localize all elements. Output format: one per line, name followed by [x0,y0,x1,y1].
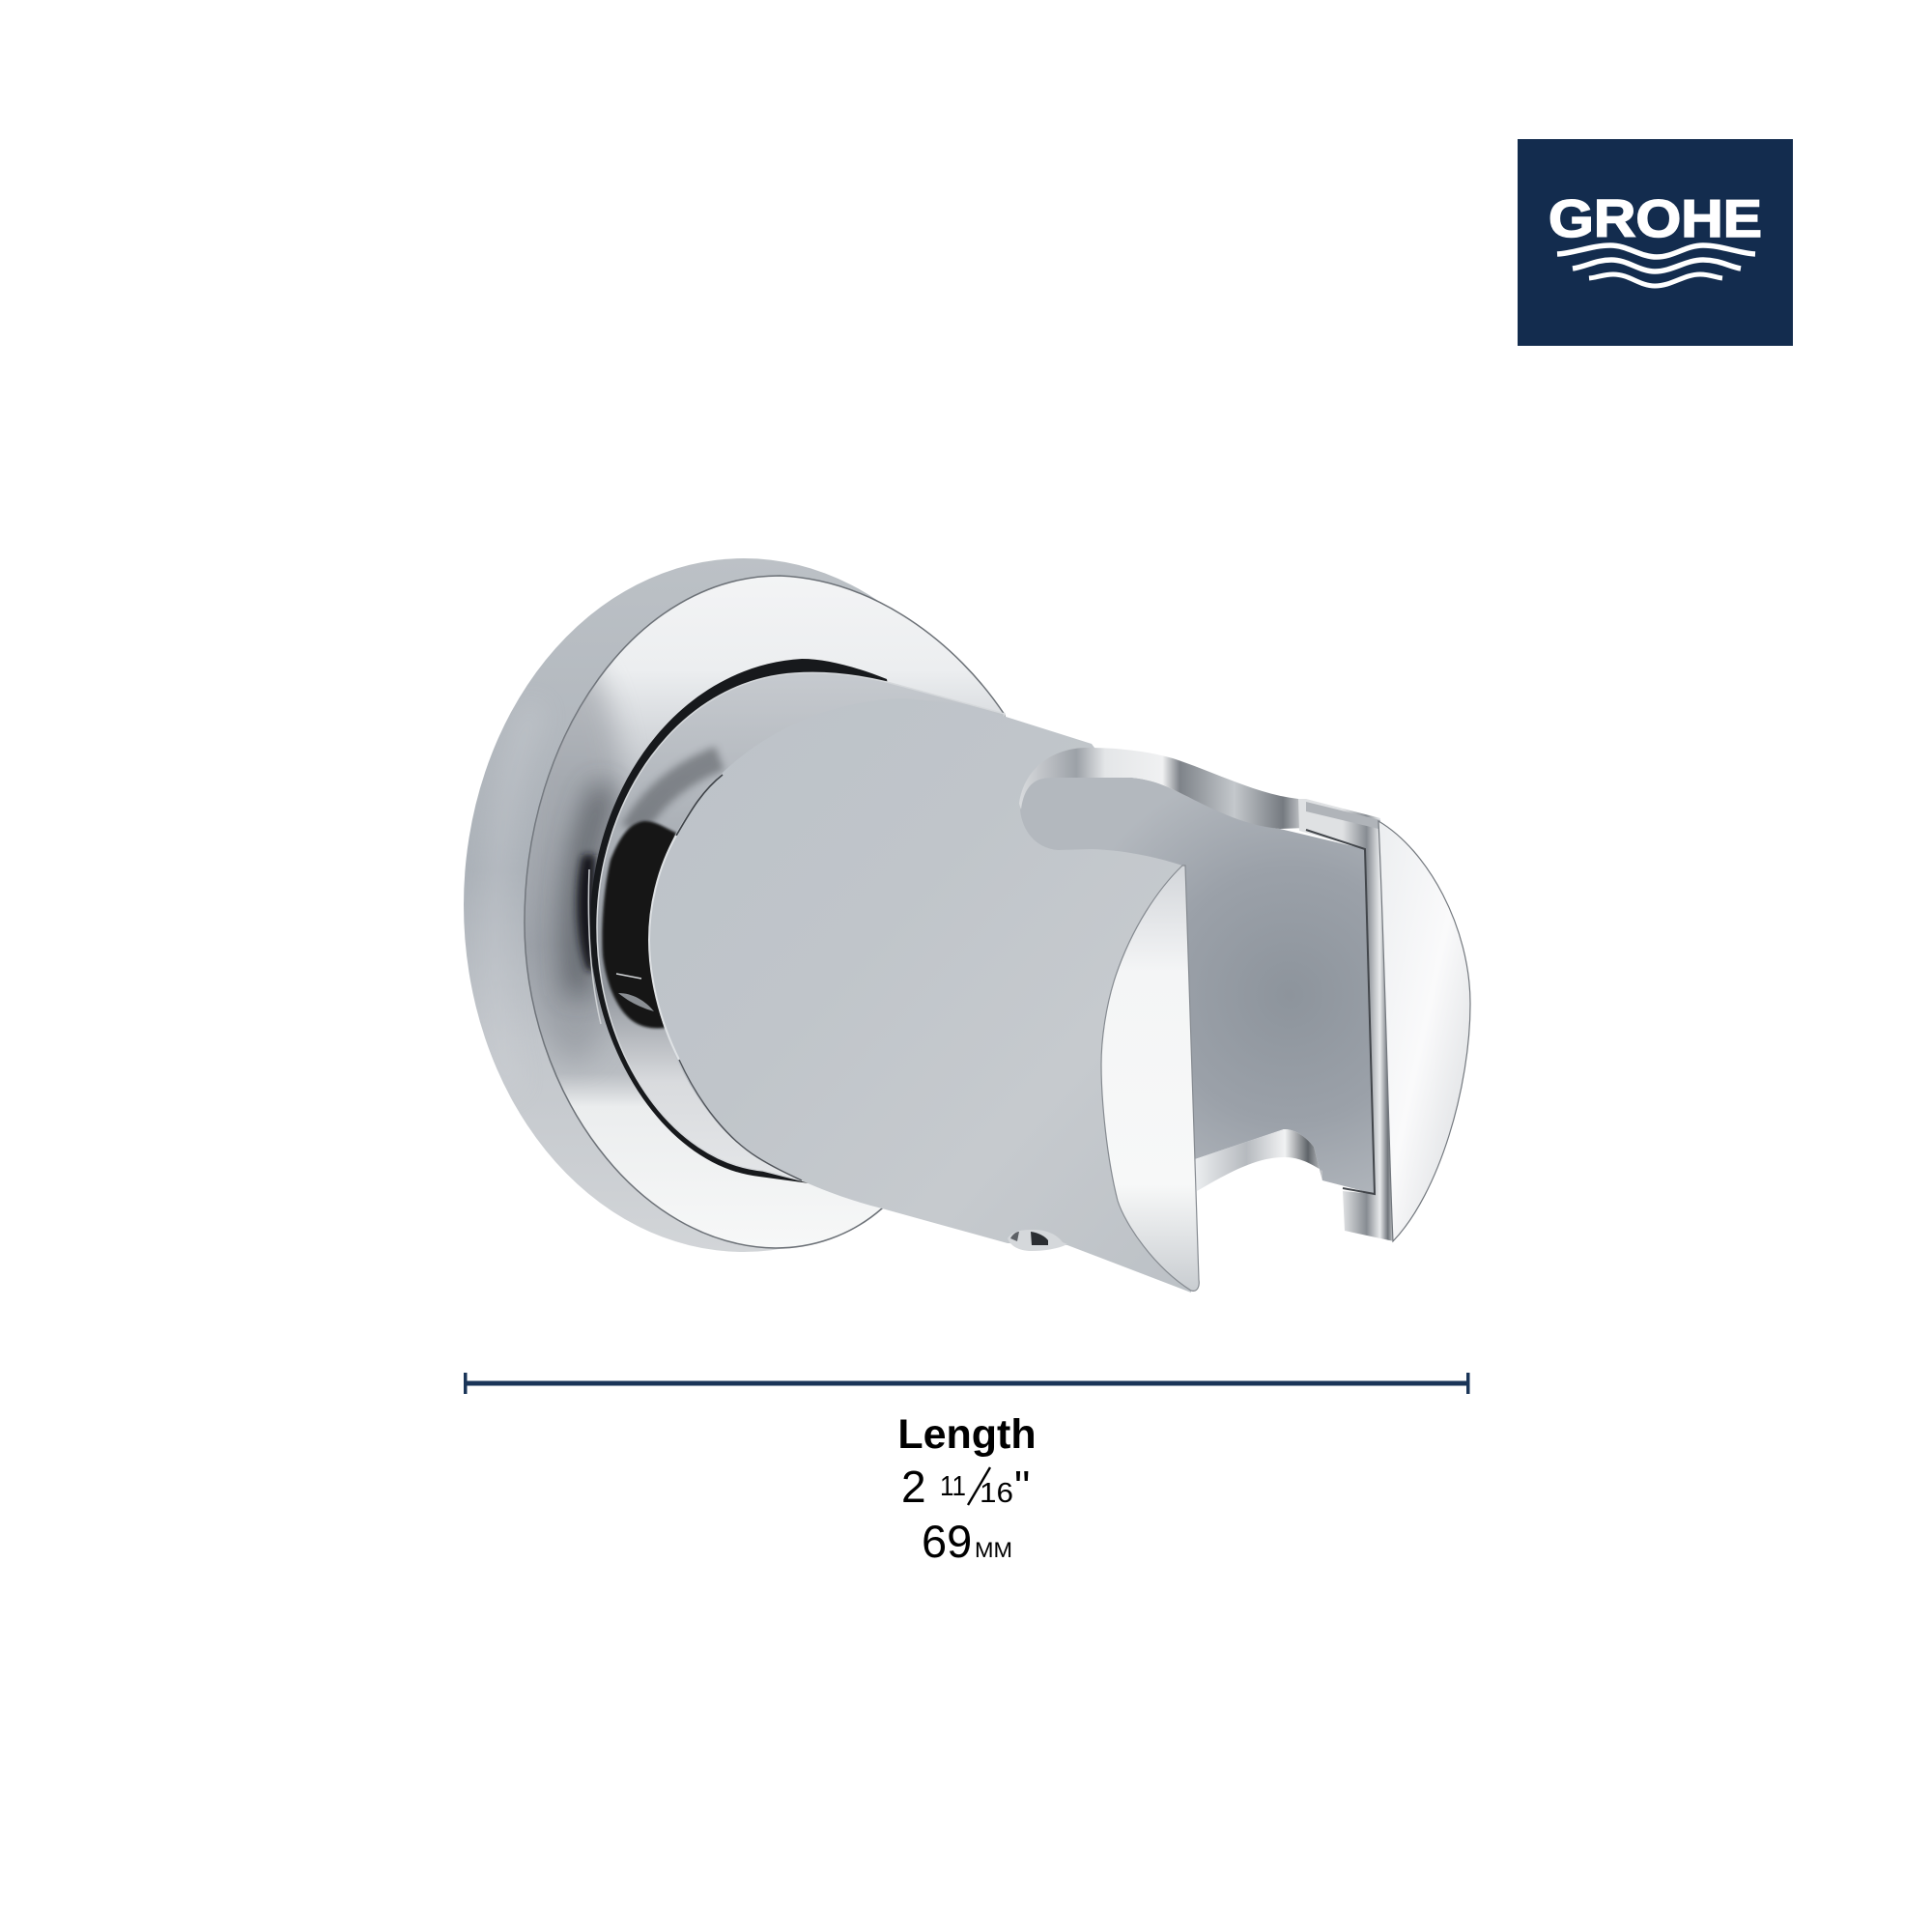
chrome bracket strip [1298,799,1394,1241]
top chrome lip [1019,748,1306,829]
dimension line: length [464,1373,1470,1394]
product photo: wall-mounted shower holder [464,558,1470,1293]
metric measurement: 69 [922,1516,972,1567]
bottom chrome lip [1195,1129,1322,1191]
logo: GROHE: GROHE [1548,188,1762,248]
cradle interior [1020,778,1375,1194]
right chrome crescent [1378,821,1470,1241]
imperial measurement: " [1014,1462,1030,1512]
wall plate front [522,576,1005,1248]
label heading: Length: Length [897,1411,1037,1458]
imperial measurement: 16 [980,1478,1013,1509]
matte body [649,698,1191,1293]
left chrome crescent [1101,866,1199,1291]
logo: GROHE [1518,139,1793,346]
wall plate side [464,558,878,1252]
hose outlet nozzle [1008,1230,1067,1251]
imperial measurement: 2 [901,1462,926,1512]
imperial measurement: 11 [940,1471,966,1502]
infographic canvas [464,139,1793,1557]
groove shadow [588,659,918,1186]
dimension label [897,1411,1037,1567]
neck chrome [597,672,1005,1198]
metric measurement [922,1516,1012,1567]
metric measurement: MM [975,1538,1012,1562]
imperial measurement [901,1462,1030,1512]
